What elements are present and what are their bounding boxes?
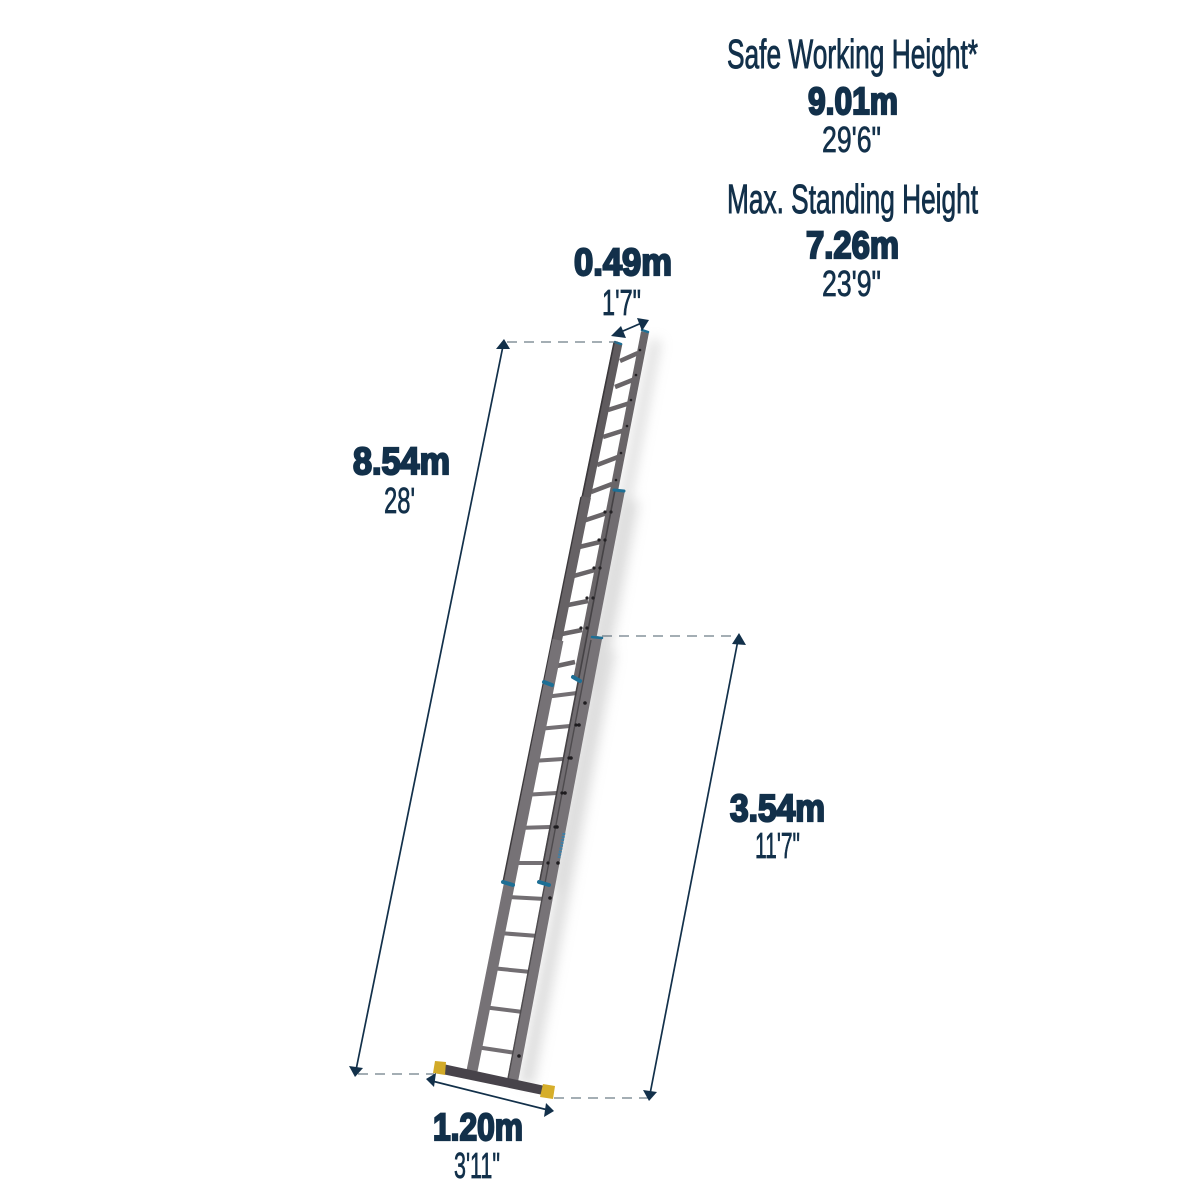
label: top width metric: 0.49m <box>574 242 672 284</box>
value: max standing height metric: 7.26m <box>806 225 899 267</box>
heading: safe working height: Safe Working Height* <box>727 31 978 77</box>
middle ladder section <box>503 490 620 882</box>
blue stile caps <box>503 330 648 885</box>
ladder shadow <box>526 340 656 1085</box>
label: stabiliser width imperial: 3'11" <box>454 1145 500 1186</box>
ladder illustration <box>433 330 656 1099</box>
ladder brand label <box>559 833 564 858</box>
value: safe working height metric: 9.01m <box>808 81 898 123</box>
top ladder section <box>544 332 645 682</box>
label: stabiliser width metric: 1.20m <box>433 1107 523 1149</box>
dimension: top section width <box>574 242 672 338</box>
heading: max standing height: Max. Standing Height <box>727 176 978 222</box>
value: safe working height imperial: 29'6" <box>822 119 881 160</box>
label: overall length imperial: 28' <box>384 480 415 521</box>
left yellow foot <box>433 1061 446 1075</box>
stabiliser bar <box>442 1064 545 1095</box>
label: overall length metric: 8.54m <box>353 441 450 483</box>
panel: height specifications <box>727 31 978 304</box>
label: closed length imperial: 11'7" <box>755 825 800 866</box>
value: max standing height imperial: 23'9" <box>822 263 881 304</box>
right yellow foot <box>540 1084 555 1099</box>
dimension: overall length <box>349 339 618 1077</box>
label: closed length metric: 3.54m <box>730 788 825 830</box>
label: top width imperial: 1'7" <box>602 282 641 323</box>
dimension: stabiliser width <box>426 1073 554 1186</box>
bottom ladder section <box>471 636 597 1084</box>
dimension: closed length <box>554 633 825 1101</box>
